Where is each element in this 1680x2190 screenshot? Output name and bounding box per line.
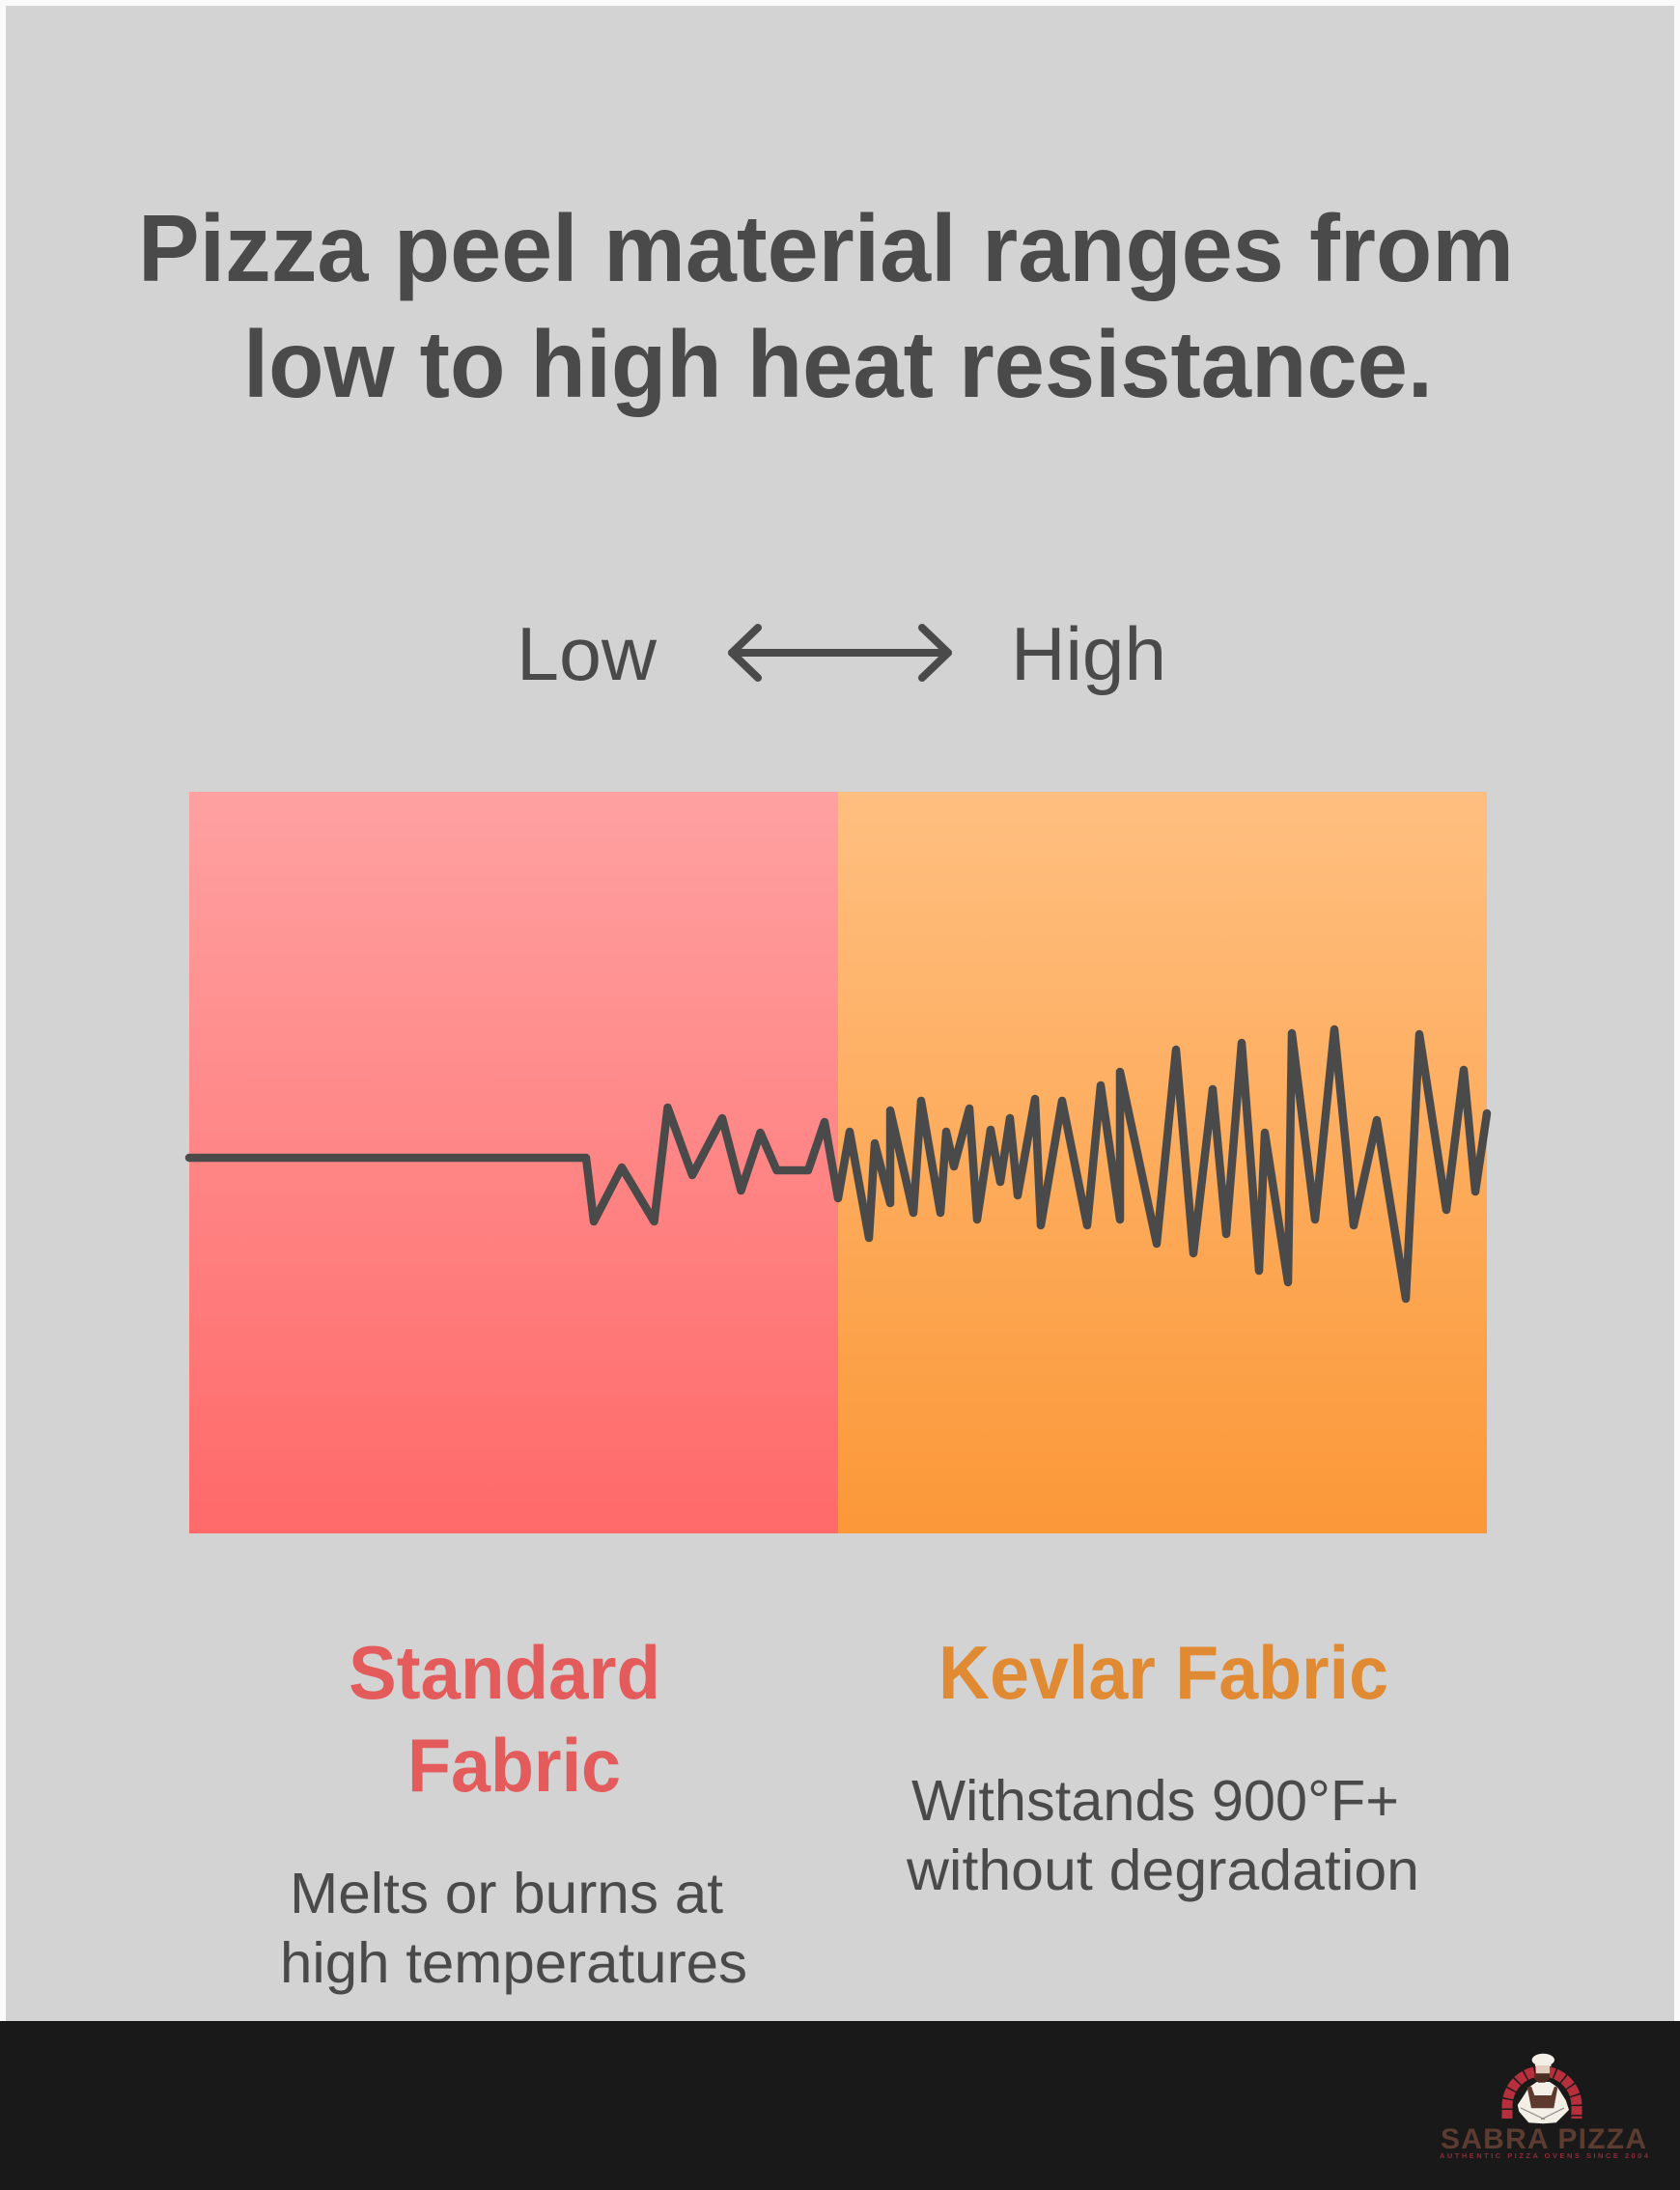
chart: heat resistance panels with waveform [189,792,1487,1533]
title [138,195,1514,417]
logo wordmark: SABRA PIZZA [1441,2123,1646,2155]
text: kevlar fabric description: without degradation [906,1839,1419,1902]
heading: kevlar fabric: Kevlar Fabric [938,1630,1388,1715]
panel: standard fabric gradient [189,792,838,1533]
scale label: low: Low [517,611,658,696]
heading: standard fabric [349,1630,660,1808]
footer bar [0,2021,1680,2190]
heading: standard fabric: Fabric [407,1723,621,1808]
waveform line [189,1029,1487,1299]
title: low to high heat resistance. [243,311,1433,417]
title: Pizza peel material ranges from [138,195,1514,301]
logo: Sabra Pizza [1440,2054,1649,2160]
icon: double-headed arrow [732,628,948,678]
icon: brick arch [1507,2071,1577,2119]
heading: standard fabric: Standard [349,1630,660,1715]
icon: chef [1518,2054,1569,2123]
scale label: high: High [1011,611,1166,696]
text: kevlar fabric description: Withstands 900°F+ [911,1769,1399,1833]
panel: kevlar fabric gradient [838,792,1487,1533]
text: kevlar fabric description [906,1769,1419,1902]
text: standard fabric description: Melts or burns at [290,1862,723,1925]
logo tagline: AUTHENTIC PIZZA OVENS SINCE 2004 [1440,2151,1649,2160]
text: standard fabric description: high temperatures [280,1931,747,1995]
text: standard fabric description [280,1862,747,1995]
